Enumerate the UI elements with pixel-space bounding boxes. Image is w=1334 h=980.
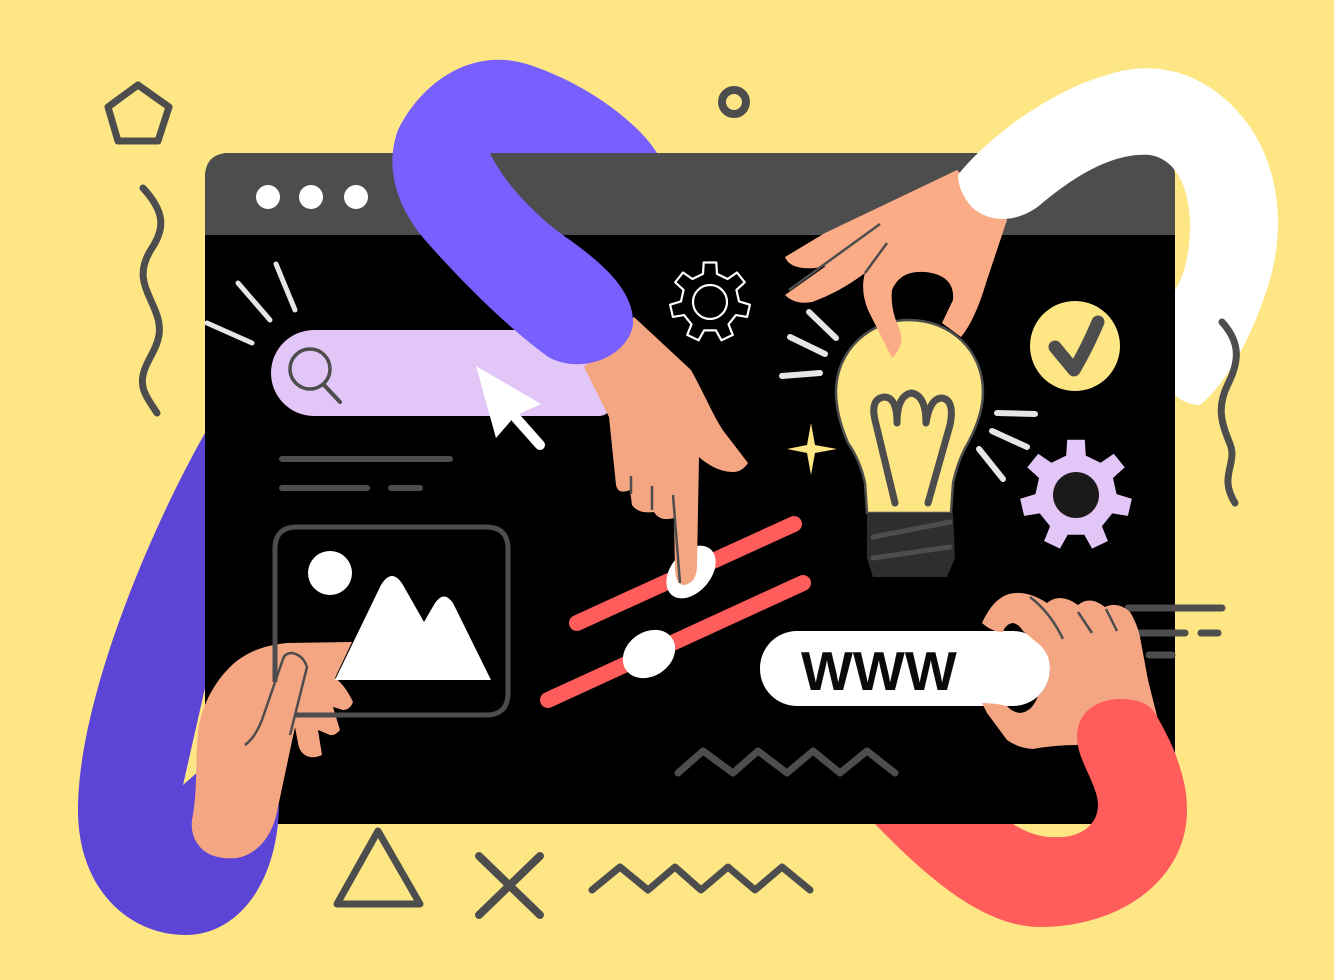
url bar	[760, 631, 1050, 706]
sparkle rays: bulb	[782, 312, 1035, 479]
hand: gripping url bar	[982, 593, 1157, 749]
slider: top	[577, 524, 794, 623]
icon: magnifier	[290, 349, 340, 402]
sleeve: blue-violet arm	[392, 60, 657, 364]
image mountains	[335, 576, 491, 680]
zigzag: window	[678, 751, 895, 773]
hand: holding the bulb	[785, 170, 1007, 358]
zigzag: bottom	[592, 867, 810, 890]
icon: check badge	[1030, 301, 1120, 391]
sleeve: white arm	[958, 68, 1278, 405]
search bar	[271, 330, 610, 416]
sleeve: indigo arm	[78, 433, 279, 935]
icon: cross	[479, 856, 540, 915]
icon: pentagon	[108, 85, 169, 141]
hand: pointing at slider	[584, 317, 748, 585]
image sun	[308, 551, 352, 595]
icon: light bulb	[836, 320, 983, 577]
icon: outline gear	[670, 262, 750, 340]
speed lines	[1128, 608, 1222, 655]
sparkle rays: search bar	[207, 264, 295, 343]
window control dots	[256, 185, 368, 209]
icon: sparkle star	[787, 423, 837, 475]
slider: bottom	[548, 583, 803, 700]
icon: lilac gear	[1020, 440, 1132, 549]
squiggle: left	[142, 188, 161, 413]
text placeholder lines	[282, 459, 450, 488]
icon: mouse cursor	[476, 366, 541, 445]
squiggle: right	[1221, 322, 1236, 503]
hand: holding image card	[192, 642, 353, 858]
sleeve: red arm	[875, 699, 1187, 927]
image card	[275, 527, 508, 715]
icon: small ring	[722, 90, 746, 114]
text: WWW: WWW	[801, 640, 957, 702]
panel: browser window	[205, 153, 1175, 824]
icon: triangle	[337, 831, 420, 904]
